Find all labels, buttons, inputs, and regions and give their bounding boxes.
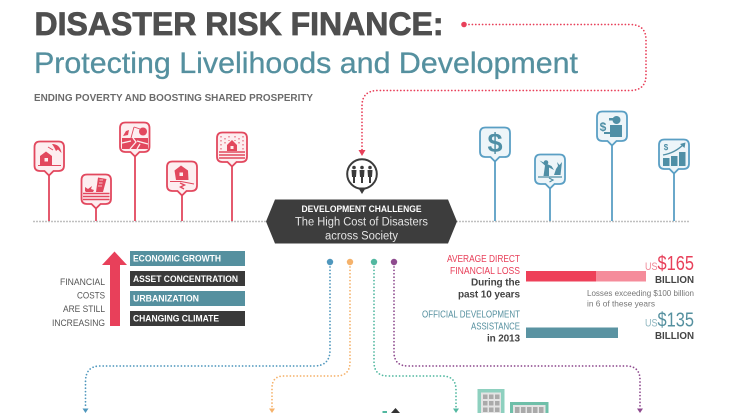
value: US$135 billion: BILLION [655,331,694,342]
stat label: official development assistance: OFFICIAL DEVELOPMENT [422,310,520,320]
note: losses exceeding 100 billion: Losses exceeding $100 billion [587,288,694,298]
list: cost drivers [130,251,245,326]
icon pin: flood and tilted building [82,174,111,221]
stat label: average direct financial loss: During the [471,278,520,288]
icon pin: person receiving money [597,112,627,221]
stat label: official development assistance: in 2013 [487,334,520,344]
stat label: average direct financial loss: AVERAGE DIRECT [447,254,520,265]
icon pin: rain and flood [217,132,247,221]
banner: development challenge: across Society [325,230,398,242]
icon pin: dollar: $ [487,128,503,158]
value: US$165 billion: BILLION [655,275,694,286]
list: cost drivers: ECONOMIC GROWTH [133,254,221,264]
value: US$135 billion: US$135 [645,310,694,332]
connector: green [371,259,459,413]
stat label: average direct financial loss: FINANCIAL LOSS [450,266,520,277]
subtitle: Protecting Livelihoods and Development [34,47,579,80]
banner: development challenge: DEVELOPMENT CHALLENGE [302,204,422,214]
connector: purple [391,259,643,413]
label: financial costs still increasing [52,277,105,329]
icon pin: growth chart [659,140,689,221]
value: US$135 billion [645,310,694,342]
icon pin: person receiving money: $ [600,120,607,134]
note: losses exceeding 100 billion: in 6 of these years [587,298,655,308]
icon pin: people on cracked ground [535,154,565,221]
arrow: rising costs [102,252,127,326]
icon pin: dollar [480,128,510,221]
bar: development assistance [526,328,618,338]
stat label: official development assistance [422,310,520,344]
value: US$165 billion [645,253,694,286]
icon pin: house in landslide [167,162,197,221]
banner: development challenge [266,200,457,244]
label: financial costs still increasing: COSTS [77,290,105,302]
ground line [33,220,690,222]
icon: buildings [478,389,548,413]
connector: title to development challenge [358,22,646,156]
connector: orange [269,259,353,413]
banner: development challenge: The High Cost of Disasters [295,216,428,228]
icon: partial roof [382,408,400,413]
icon: people in speech bubble [347,159,377,194]
title: DISASTER RISK FINANCE: [34,6,444,42]
label: financial costs still increasing: INCREASING [52,318,105,329]
label: financial costs still increasing: ARE STILL [63,304,105,315]
icon pin: growth chart: $ [664,143,669,152]
connector: blue [82,259,333,413]
stat label: average direct financial loss: past 10 years [458,290,520,300]
list: cost drivers: URBANIZATION [133,294,199,304]
value: US$165 billion: US$165 [645,253,694,275]
list: cost drivers: ASSET CONCENTRATION [133,274,238,284]
icon pin: earthquake [120,122,150,221]
tagline: ENDING POVERTY AND BOOSTING SHARED PROSPERITY [34,93,313,104]
label: financial costs still increasing: FINANCIAL [60,277,105,288]
stat label: average direct financial loss [447,254,520,300]
icon pin: storm and house [34,142,64,221]
bar: financial loss [526,271,646,282]
list: cost drivers: CHANGING CLIMATE [133,314,219,324]
note: losses exceeding 100 billion [587,288,694,308]
stat label: official development assistance: ASSISTANCE [471,322,520,332]
